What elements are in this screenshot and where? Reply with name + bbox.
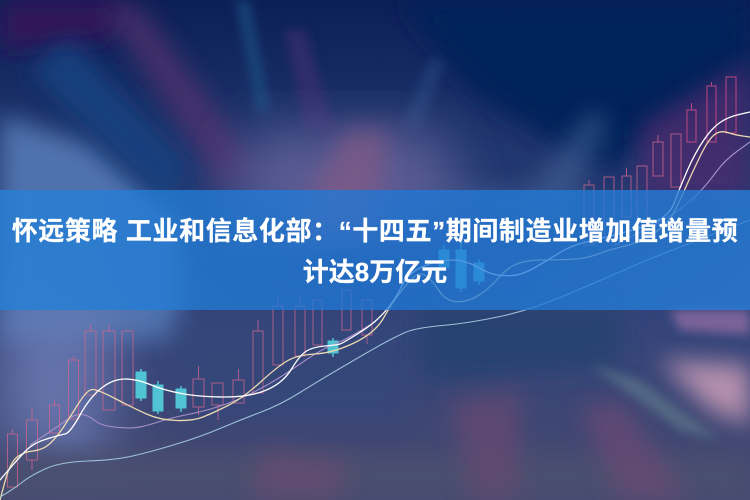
title text: [12, 216, 738, 287]
yellow average line: [0, 132, 750, 500]
pink hollow candlesticks: [8, 77, 736, 487]
purple average line: [30, 142, 750, 445]
title text: 计达8万亿元: [303, 257, 447, 287]
blue title banner: [0, 190, 750, 310]
teal filled candlesticks: [136, 241, 484, 414]
grey-blue average line: [0, 220, 750, 497]
white average line: [0, 112, 750, 480]
title text: 怀远策略 工业和信息化部：“十四五”期间制造业增加值增量预: [12, 216, 738, 246]
moving average lines: [0, 112, 750, 500]
